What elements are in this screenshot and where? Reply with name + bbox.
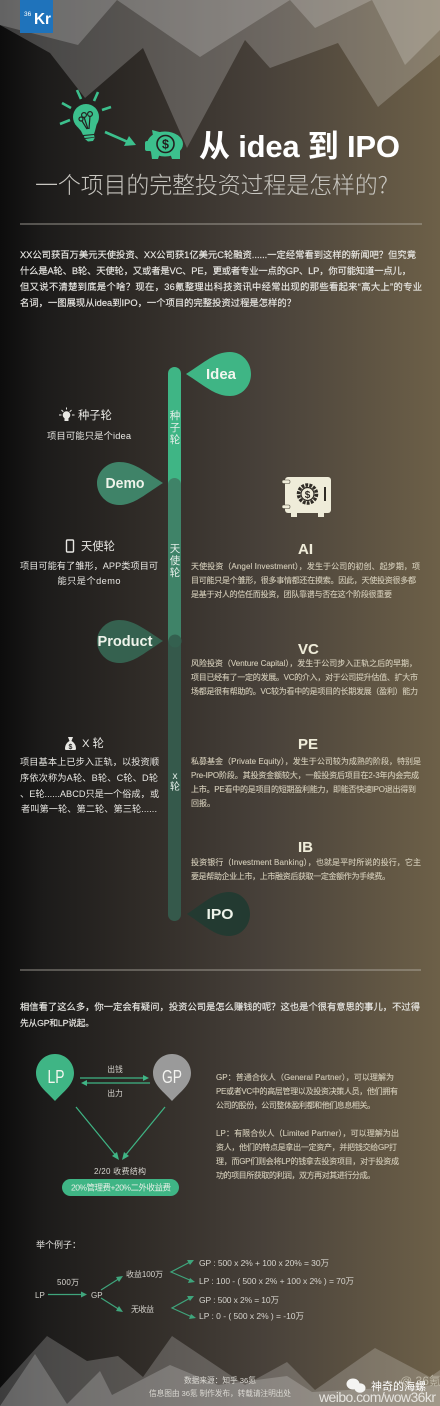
pin: GP xyxy=(153,1054,191,1101)
panel: AI: 是基于对人的信任而投资，团队靠谱与否在这个阶段很重要 xyxy=(191,589,392,599)
left: X round: 、E轮......ABCD只是一个俗成，或 xyxy=(20,788,159,799)
watermark: 神奇的海螺 xyxy=(371,1379,426,1393)
fee structure: 2/20 收费结构 xyxy=(94,1166,146,1176)
pin: GP: GP xyxy=(162,1067,182,1087)
panel: AI: 目可能只是个雏形，很多事情都还在摸索。因此，天使投资很多都 xyxy=(191,575,416,585)
icon: small bulb xyxy=(59,408,74,421)
text block: GP definition xyxy=(216,1072,398,1110)
subtitle: 一个项目的完整投资过程是怎样的? xyxy=(35,166,388,200)
left: angel round xyxy=(20,539,158,586)
timeline label: seed: 轮 xyxy=(170,433,181,446)
text block: LP definition: 资人，他们的特点是拿出一定资产，并把钱交给GP打 xyxy=(216,1142,397,1152)
panel: VC: 场都是很有帮助的。VC较为看中的是项目的长期发展（盈利）能力 xyxy=(191,686,418,696)
logo: 36Kr: Kr xyxy=(34,11,51,28)
text block: question xyxy=(20,1001,420,1028)
icon: safe: $ xyxy=(305,490,311,501)
top mountains xyxy=(0,0,440,148)
timeline label: angel: 天 xyxy=(170,543,181,555)
panel: PE xyxy=(191,736,421,808)
arrows: to fee structure xyxy=(76,1107,165,1160)
example flow: 收益100万 xyxy=(126,1269,163,1279)
timeline label: seed: 子 xyxy=(170,422,180,434)
timeline bar xyxy=(168,367,182,921)
text block: GP definition: 公司的股份，公司整体盈利都和他们息息相关。 xyxy=(216,1100,375,1110)
arrows: money and labour between LP and GP xyxy=(80,1064,150,1098)
intro text: 什么是A轮、B轮、天使轮，又或者是VC、PE，更或者专业一点的GP、LP，你可能知道一点儿， xyxy=(20,265,411,276)
arrows: example branches xyxy=(48,1261,192,1317)
text block: LP definition: LP：有限合伙人（Limited Partner），可以理解为出 xyxy=(216,1128,399,1138)
pin: LP xyxy=(36,1054,74,1101)
panel: VC: 项目已经有了一定的发展。VC的介入，对于公司提升估值、扩大市 xyxy=(191,672,418,682)
panel: PE: 回报。 xyxy=(191,798,215,808)
panel: PE: 上市。PE看中的是项目的短期盈利能力，即能否快速IPO退出得到 xyxy=(191,784,416,794)
icon: money bag: $ xyxy=(69,744,73,751)
timeline label: angel xyxy=(170,543,181,579)
logo: 36Kr: 36 xyxy=(24,11,32,18)
text block: GP definition: GP：普通合伙人（General Partner），可以理解为 xyxy=(216,1072,394,1082)
example flow: GP xyxy=(91,1291,103,1300)
panel: IB: 投资银行（Investment Banking），也就是平时所说的投行，它主 xyxy=(191,857,421,867)
left: angel round: 天使轮 xyxy=(81,539,115,553)
fee structure xyxy=(62,1166,179,1196)
left: seed round: 种子轮 xyxy=(78,408,112,422)
left: X round: 序依次称为A轮、B轮、C轮、D轮 xyxy=(20,772,158,783)
panel: AI: 天使投资（Angel Investment），发生于公司的初创、起步期，项 xyxy=(191,561,420,571)
fee structure: 20%管理费+20%二外收益费 xyxy=(71,1182,171,1192)
panel: AI xyxy=(191,541,420,599)
logo: 36Kr xyxy=(20,0,53,33)
pin: LP: LP xyxy=(48,1067,64,1087)
pin: IPO xyxy=(187,892,250,936)
icon: safe xyxy=(282,477,331,517)
left: seed round xyxy=(47,408,132,441)
arrows: money and labour between LP and GP: 出力 xyxy=(107,1088,123,1098)
example flow xyxy=(35,1258,354,1321)
panel: VC: VC xyxy=(298,641,319,658)
panel: IB xyxy=(191,839,421,881)
icon: light bulb xyxy=(60,90,111,142)
icon: wechat xyxy=(346,1378,366,1393)
text block: question: 先从GP和LP说起。 xyxy=(20,1017,94,1028)
pin: Product: Product xyxy=(98,633,153,650)
text block: LP definition xyxy=(216,1128,399,1180)
panel: PE: 私募基金（Private Equity），发生于公司较为成熟的阶段，特别是 xyxy=(191,756,421,766)
example flow: LP : 100 - ( 500 x 2% + 100 x 2% ) = 70万 xyxy=(199,1276,354,1286)
left: angel round: 项目可能有了雏形，APP类项目可 xyxy=(20,560,158,571)
bottom mountains xyxy=(0,1336,440,1406)
example flow: LP xyxy=(35,1291,45,1300)
example flow: LP : 0 - ( 500 x 2% ) = -10万 xyxy=(199,1311,304,1321)
icon: phone xyxy=(66,540,74,552)
left: seed round: 项目可能只是个idea xyxy=(47,430,132,441)
left: X round: 项目基本上已步入正轨，以投资顺 xyxy=(20,756,159,767)
arrows: money and labour between LP and GP: 出钱 xyxy=(107,1064,123,1074)
panel: AI: AI xyxy=(298,541,313,558)
icon: piggy bank xyxy=(145,130,183,159)
intro text: 名词，一图展现从idea到IPO，一个项目的完整投资过程是怎样的？ xyxy=(20,297,296,308)
panel: IB: 要是帮助企业上市，上市融资后获取一定金额作为手续费。 xyxy=(191,871,390,881)
watermark: weibo.com/wow36kr xyxy=(318,1389,436,1405)
title: 从 idea 到 IPO xyxy=(199,129,400,164)
pin: Demo: Demo xyxy=(106,475,144,492)
arrow: idea to money xyxy=(105,132,136,146)
example heading: 举个例子： xyxy=(36,1239,81,1250)
example flow: 500万 xyxy=(57,1278,79,1287)
text block: question: 相信看了这么多，你一定会有疑问，投资公司是怎么赚钱的呢？这也是个很有意思的事儿，不过得 xyxy=(20,1001,420,1012)
intro text: XX公司获百万美元天使投资、XX公司获1亿美元C轮融资......一定经常看到这样的新闻吧？但究竟 xyxy=(20,249,416,260)
left: X round: 者叫第一轮、第二轮、第三轮...... xyxy=(21,803,157,814)
footer credits: 信息图由 36氪 制作发布，转载请注明出处 xyxy=(149,1388,291,1398)
example flow: 无收益 xyxy=(131,1304,154,1314)
pin: Product xyxy=(97,620,163,663)
text block: GP definition: PE或者VC中的高层管理以及投资决策人员，他们拥有 xyxy=(216,1086,398,1096)
pin: Idea: Idea xyxy=(206,366,237,383)
pin: Idea xyxy=(186,352,251,396)
timeline label: seed: 种 xyxy=(170,409,180,422)
panel: PE: Pre-IPO阶段。其投资金额较大，一般投资后项目在2-3年内会完成 xyxy=(191,770,419,780)
intro text xyxy=(20,249,422,308)
example flow: GP : 500 x 2% + 100 x 20% = 30万 xyxy=(199,1258,329,1268)
timeline label: x: 轮 xyxy=(170,780,180,793)
pin: IPO: IPO xyxy=(206,906,234,923)
example flow: GP : 500 x 2% = 10万 xyxy=(199,1295,279,1305)
left: angel round: 能只是个demo xyxy=(58,575,120,586)
footer credits: 数据来源：知乎 36氪 xyxy=(184,1375,256,1385)
footer credits xyxy=(149,1375,291,1398)
panel: PE: PE xyxy=(298,736,318,753)
watermark: @ 36氪 xyxy=(400,1373,440,1388)
timeline label: angel: 轮 xyxy=(170,566,181,579)
panel: VC: 风险投资（Venture Capital），发生于公司步入正轨之后的早期， xyxy=(191,658,417,668)
pin: Demo xyxy=(97,462,163,505)
panel: IB: IB xyxy=(298,839,313,856)
timeline label: x: x xyxy=(172,771,178,782)
panel: VC xyxy=(191,641,418,696)
icon: piggy bank: $ xyxy=(162,138,169,152)
left: X round: X 轮 xyxy=(82,736,104,750)
left: X round xyxy=(20,736,159,814)
timeline label: seed xyxy=(170,409,181,446)
watermark xyxy=(318,1373,440,1405)
text block: LP definition: 功的项目所获取的利润，双方再对其进行分成。 xyxy=(216,1170,375,1180)
timeline label: x xyxy=(170,771,180,793)
intro text: 但又说不清楚到底是个啥？现在，36氪整理出科技资讯中经常出现的那些看起来“高大上”的专业 xyxy=(20,281,422,292)
timeline label: angel: 使 xyxy=(170,554,181,567)
text block: LP definition: 理，而GP们则会将LP的钱拿去投资项目，对于投资成 xyxy=(216,1156,399,1166)
